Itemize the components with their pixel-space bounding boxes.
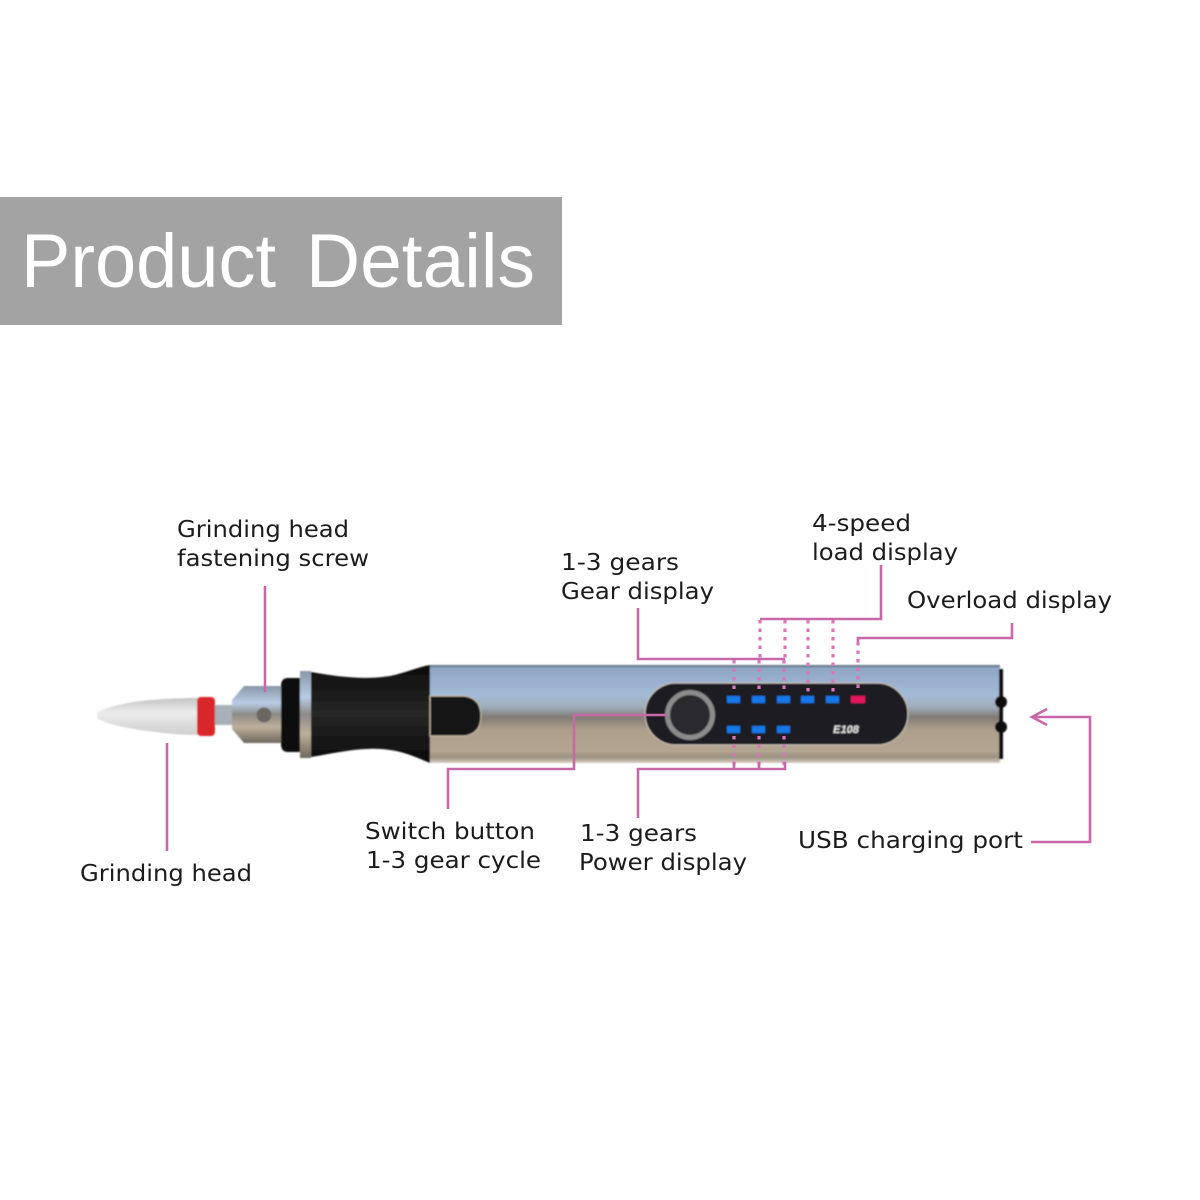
grip tab — [430, 696, 481, 736]
callout: 4-speed load display: load display — [812, 538, 958, 566]
control panel — [645, 683, 908, 745]
overload LED — [851, 696, 865, 703]
callout: gear display: 1-3 gears — [561, 548, 679, 576]
pen body — [430, 665, 1000, 763]
callout: usb charging port with arrow: USB charging port — [798, 826, 1023, 854]
metal collar with fastening screw — [232, 686, 282, 743]
switch button — [668, 692, 712, 738]
title banner — [0, 197, 562, 325]
title banner: Details — [306, 219, 535, 304]
callout: overload display — [858, 586, 1112, 692]
callout: 4-speed load display: 4-speed — [812, 509, 911, 537]
callout: gear display: Gear display — [561, 577, 714, 605]
callout: overload display: Overload display — [907, 586, 1112, 614]
model label: E108 — [833, 724, 860, 736]
title banner: Product — [21, 219, 276, 304]
callout: grinding head fastening screw: fastening screw — [177, 544, 369, 572]
power LEDs — [727, 726, 790, 733]
callout: switch button: Switch button — [365, 817, 535, 845]
callout: usb charging port with arrow — [798, 709, 1090, 854]
callout: power display: Power display — [579, 848, 747, 876]
callout: grinding head: Grinding head — [80, 859, 252, 887]
product: rotary pen tool — [97, 665, 1007, 763]
callout: power display: 1-3 gears — [580, 819, 697, 847]
end cap port — [995, 669, 1007, 759]
callout: grinding head fastening screw — [177, 515, 369, 692]
callout: gear display — [561, 548, 785, 692]
black grip — [281, 665, 430, 763]
callout: switch button: 1-3 gear cycle — [366, 846, 541, 874]
callout: power display — [579, 736, 785, 876]
callout: switch button — [365, 715, 666, 874]
grinding bit — [97, 697, 232, 736]
callout: grinding head fastening screw: Grinding head — [177, 515, 349, 543]
callout: 4-speed load display — [760, 509, 958, 692]
load LEDs — [727, 696, 839, 703]
